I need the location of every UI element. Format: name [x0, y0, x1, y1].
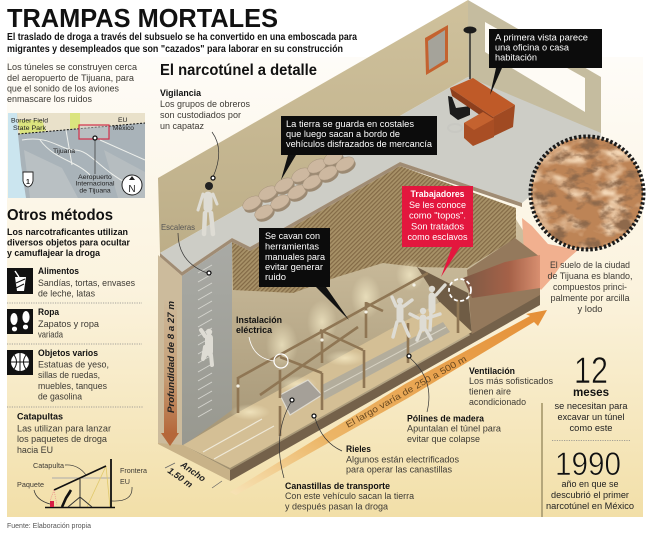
stat: 12 meses: excavar un túnel [558, 412, 624, 423]
soil sample circle [530, 136, 644, 250]
length arrow [230, 310, 547, 495]
mirror [425, 25, 448, 75]
electrical circle [274, 354, 288, 368]
method: Ropa: variada [38, 330, 64, 340]
callout: Trabajadores: Trabajadores [410, 189, 464, 200]
catapult diagram [17, 459, 147, 508]
soil description: El suelo de la ciudad [550, 260, 630, 271]
callout: office: A primera vista parece [495, 32, 588, 44]
dashed ventilation circle [449, 279, 471, 301]
source: Fuente: Elaboración propia [7, 521, 92, 530]
stat: 12 meses [554, 350, 628, 434]
icon: drink cup [7, 268, 33, 294]
floor lights [230, 350, 365, 420]
title: TRAMPAS MORTALES [7, 5, 278, 33]
intro text [7, 32, 357, 55]
map of Tijuana: México [113, 125, 134, 132]
wooden frames [238, 273, 458, 436]
label: Pólines de madera: evitar que colapse [407, 434, 480, 445]
map of Tijuana: de Tijuana [79, 188, 111, 194]
method: Ropa: Zapatos y ropa [38, 319, 100, 330]
stat: 12 meses: como este [570, 423, 612, 434]
icon: basketball [7, 350, 33, 375]
label: Ventilación [469, 366, 553, 408]
sandbags [240, 148, 358, 225]
soil description: compuestos princi- [553, 282, 627, 293]
right soil block [467, 238, 540, 338]
label: Instalación eléctrica: Instalación [236, 315, 282, 326]
callout: manual tools: manuales para [265, 252, 326, 263]
label: Rieles: para operar las canastillas [346, 464, 452, 476]
callout: Trabajadores: como "topos". [409, 210, 466, 222]
method: Alimentos: de leche, latas [38, 288, 95, 300]
callout: soil storage: vehículos disfrazados de mercancía [286, 139, 433, 150]
walkway [322, 322, 450, 400]
other methods intro: Los narcotraficantes utilizan [7, 227, 128, 238]
map of Tijuana [8, 113, 145, 198]
soil description: de Tijuana es blando, [548, 271, 632, 282]
callout: Trabajadores: como esclavos [408, 232, 468, 243]
left text: tunnels location: que el sonido de los aviones [7, 84, 119, 94]
method: Ropa [7, 307, 100, 340]
label: Instalación eléctrica [236, 315, 282, 361]
stat: 1990: año en que se [562, 479, 618, 490]
label: Ventilación: Ventilación [469, 366, 515, 377]
tunnel base band [158, 443, 230, 481]
method: Objetos varios: de gasolina [38, 392, 83, 402]
stat: 1990 [546, 446, 634, 512]
office building walls [158, 0, 601, 253]
tunnel end [417, 267, 472, 336]
callout: soil storage [281, 116, 437, 180]
callout: office [489, 29, 602, 95]
label: Vigilancia: son custodiados por [160, 110, 242, 121]
catapult diagram: EU [120, 477, 130, 486]
map of Tijuana: Aeropuerto [78, 174, 112, 181]
icon: footprints [7, 309, 33, 334]
method: Alimentos: Alimentos [38, 266, 79, 277]
stat: 12 meses: meses [573, 387, 609, 399]
callout: Trabajadores: Son tratados [411, 222, 464, 232]
method: Catapultas: Catapultas [17, 412, 63, 422]
method: Alimentos: Sandías, tortas, envases [38, 278, 135, 289]
label: Escaleras [161, 222, 211, 275]
depth text: Profundidad de 8 a 27 m [166, 301, 176, 413]
callout: manual tools: ruido [265, 272, 286, 283]
catapult diagram: Frontera [120, 466, 147, 475]
heading: Otros métodos: Otros métodos [7, 207, 113, 224]
map of Tijuana: EU [118, 117, 128, 124]
catapult diagram: Catapulta [33, 461, 64, 470]
wall lights [266, 259, 424, 369]
tunnel floor [183, 302, 472, 468]
label: Vigilancia: Los grupos de obreros [160, 99, 250, 110]
width label [165, 459, 222, 490]
illustration: narcotunnel cutaway [158, 0, 644, 495]
label: Canastillas de transporte: Canastillas de transporte [285, 481, 390, 492]
callout: manual tools: evitar generar [265, 262, 324, 273]
callout: office: una oficina o casa [495, 42, 570, 54]
label: Ventilación: Los más sofisticados [469, 376, 553, 387]
other methods intro: y camuflajear la droga [7, 248, 101, 259]
label: Rieles: Rieles [346, 444, 371, 455]
callout: manual tools [259, 228, 349, 320]
label: Canastillas de transporte: Con este vehículo sacan la tierra [285, 491, 415, 502]
map of Tijuana: Internacional [76, 180, 115, 188]
label: Vigilancia: Vigilancia [160, 88, 202, 99]
divider bar [541, 403, 543, 517]
label: Escaleras: Escaleras [161, 222, 195, 232]
office floor [160, 77, 601, 272]
workers [392, 285, 445, 340]
label: Canastillas de transporte: y después pasan la droga [285, 502, 389, 512]
figure: climber [201, 329, 212, 365]
tunnel back wall [183, 166, 540, 470]
label: Pólines de madera: Pólines de madera [407, 414, 485, 424]
hatched soil [232, 166, 516, 293]
icon: north compass: N [128, 184, 136, 195]
shaft front face [182, 242, 232, 447]
method: Alimentos [7, 266, 135, 300]
stat: 12 meses: se necesitan para [554, 401, 628, 412]
rails [203, 419, 274, 459]
left text: tunnels location [7, 62, 138, 105]
desk [450, 78, 515, 146]
stat: 1990: 1990 [555, 446, 621, 482]
method: Catapultas: Las utilizan para lanzar [17, 424, 112, 434]
label: Pólines de madera [407, 354, 502, 445]
catapult diagram: Paquete [17, 480, 44, 489]
callout: Trabajadores: Se les conoce [409, 200, 466, 211]
map of Tijuana: Tijuana [53, 148, 75, 155]
other methods intro: diversos objetos para ocultar [7, 238, 130, 248]
left text: tunnels location: del aeropuerto de Tijuana, para [7, 73, 135, 84]
shaft side face [158, 255, 182, 447]
callout: office: habitación [495, 52, 537, 64]
left text: tunnels location: Los túneles se construyen cerca [7, 62, 138, 73]
zoom cone [522, 218, 578, 290]
method: Objetos varios: Objetos varios [38, 348, 98, 359]
heading: El narcotúnel a detalle: El narcotúnel a detalle [160, 62, 317, 79]
chair [448, 96, 470, 132]
label: Rieles [312, 414, 459, 476]
method: Objetos varios: muebles, tanques [38, 381, 107, 392]
label: Vigilancia: un capataz [160, 121, 204, 132]
map of Tijuana: Border Field [11, 118, 48, 124]
label: Ventilación: acondicionado [469, 397, 526, 408]
method: Objetos varios [7, 348, 109, 402]
left text: tunnels location: enmascare los ruidos [7, 94, 92, 105]
method: Objetos varios: Estatuas de yeso, [38, 360, 109, 370]
method: Objetos varios: sillas de ruedas, [38, 370, 100, 381]
floor lamp [464, 26, 476, 79]
figure: guard [198, 182, 217, 234]
callout: soil storage: La tierra se guarda en costales [286, 119, 414, 130]
intro text: migrantes y desempleados que son "cazados" para laborar en su construcción [7, 44, 343, 55]
method: Catapultas: los paquetes de droga [17, 434, 108, 445]
soil description: palmente por arcilla [550, 293, 630, 304]
method: Ropa: Ropa [38, 307, 60, 318]
stat: 1990: narcotúnel en México [546, 501, 634, 512]
other methods intro [7, 227, 130, 259]
width label: Ancho [178, 459, 208, 484]
method: Catapultas [17, 412, 112, 456]
soil description: y lodo [578, 304, 602, 315]
stat: 12 meses: 12 [574, 350, 608, 391]
label: Rieles: Algunos están electrificados [346, 454, 459, 466]
ladder [198, 265, 212, 417]
callout: Trabajadores [402, 186, 473, 277]
label: Ventilación: tienen aire [469, 386, 511, 398]
lamps [236, 283, 416, 388]
transport cart [280, 380, 322, 415]
callout: manual tools: Se cavan con [265, 231, 320, 242]
stat: 1990: descubrió el primer [551, 490, 630, 501]
method: Catapultas: hacia EU [17, 445, 53, 456]
soil description [548, 260, 632, 315]
label: Instalación eléctrica: eléctrica [236, 325, 273, 336]
map of Tijuana: State Park [13, 125, 47, 132]
label: Vigilancia [160, 88, 250, 180]
width label: 1.50 m [166, 465, 195, 490]
intro text: El traslado de droga a través del subsuelo se ha convertido en una emboscada para [7, 32, 357, 43]
label: Canastillas de transporte [279, 398, 415, 512]
icon: highway shield: 1 [26, 179, 30, 186]
label: Pólines de madera: Apuntalan el túnel para [407, 424, 502, 434]
length text: El largo varía de 250 a 500 m [344, 354, 468, 430]
depth arrow [161, 300, 179, 446]
callout: manual tools: herramientas [265, 242, 319, 252]
callout: soil storage: que luego sacan a bordo de [286, 129, 400, 140]
